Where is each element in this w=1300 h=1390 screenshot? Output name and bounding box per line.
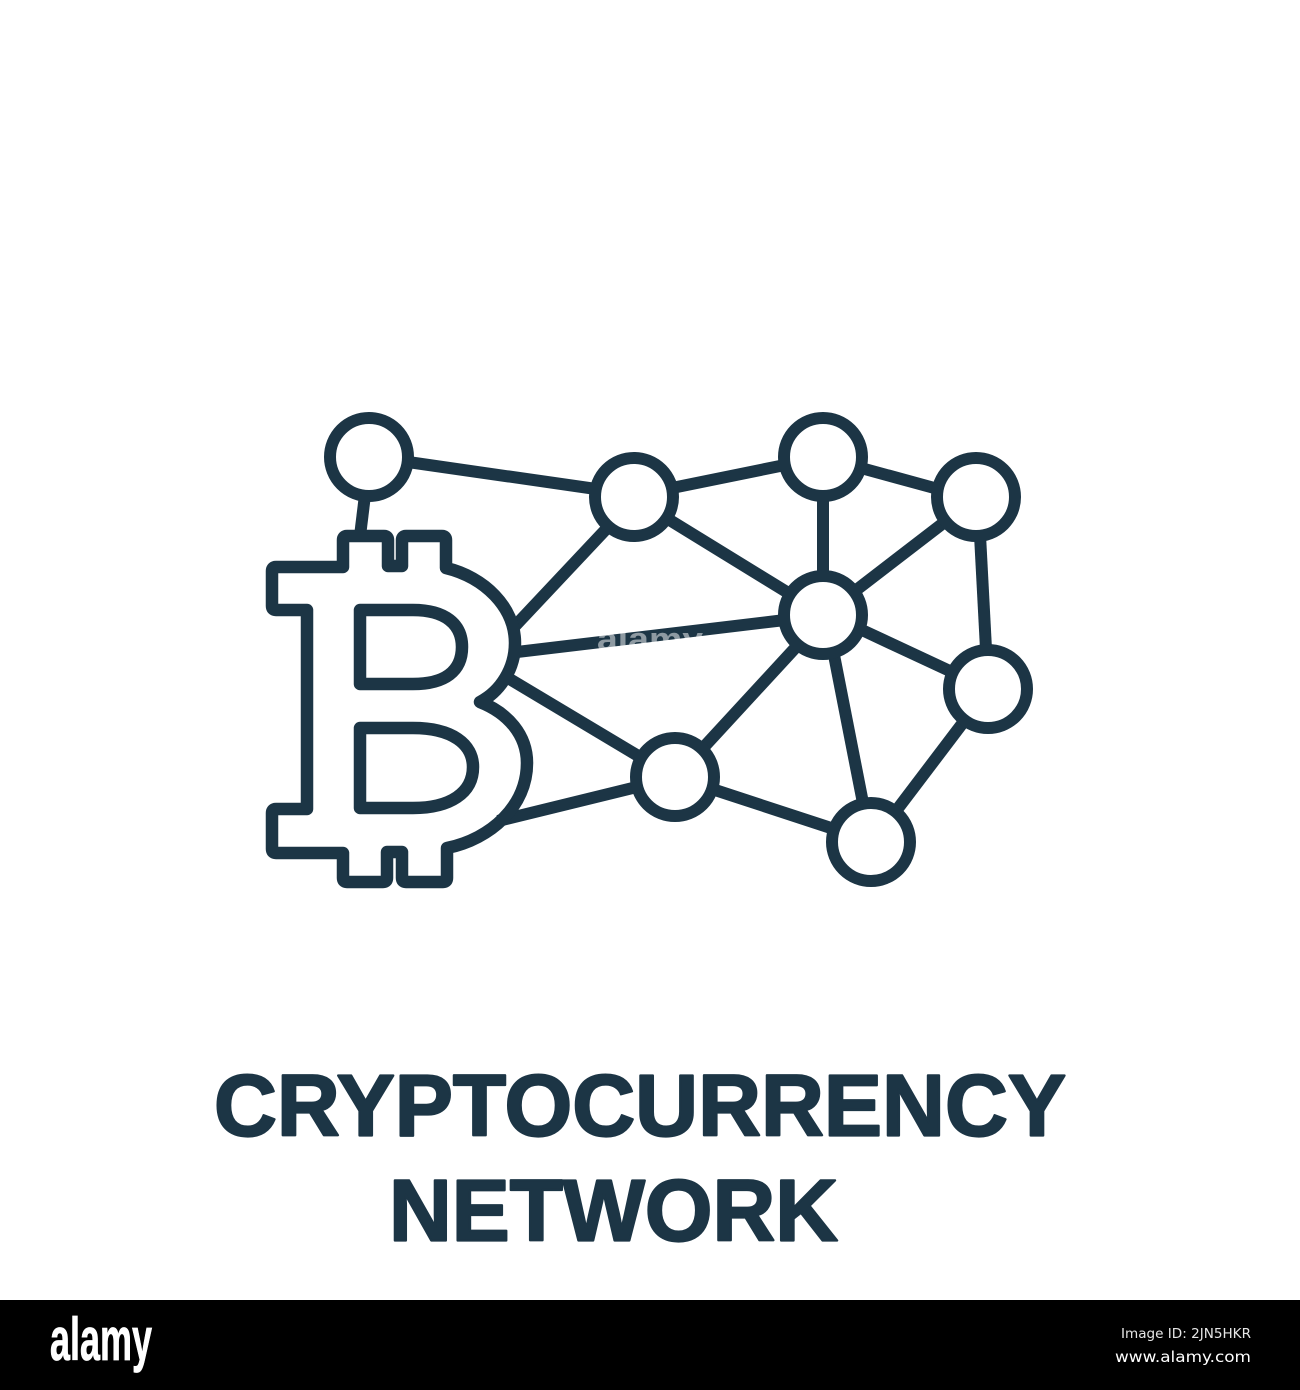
network connecting lines (360, 462, 986, 829)
title (214, 1058, 1066, 1260)
image id: Image ID: 2JN5HKR (1121, 1327, 1251, 1342)
title line 1: CRYPTOCURRENCY (214, 1058, 1066, 1154)
watermark on network line: alamy (597, 621, 703, 657)
footer bar (0, 1300, 1300, 1390)
bitcoin symbol (272, 536, 527, 882)
website: www.alamy.com (1115, 1348, 1251, 1366)
title line 2: NETWORK (389, 1162, 838, 1260)
network nodes (330, 418, 1027, 881)
alamy logo: alamy (50, 1306, 152, 1373)
network icon (272, 418, 1027, 882)
